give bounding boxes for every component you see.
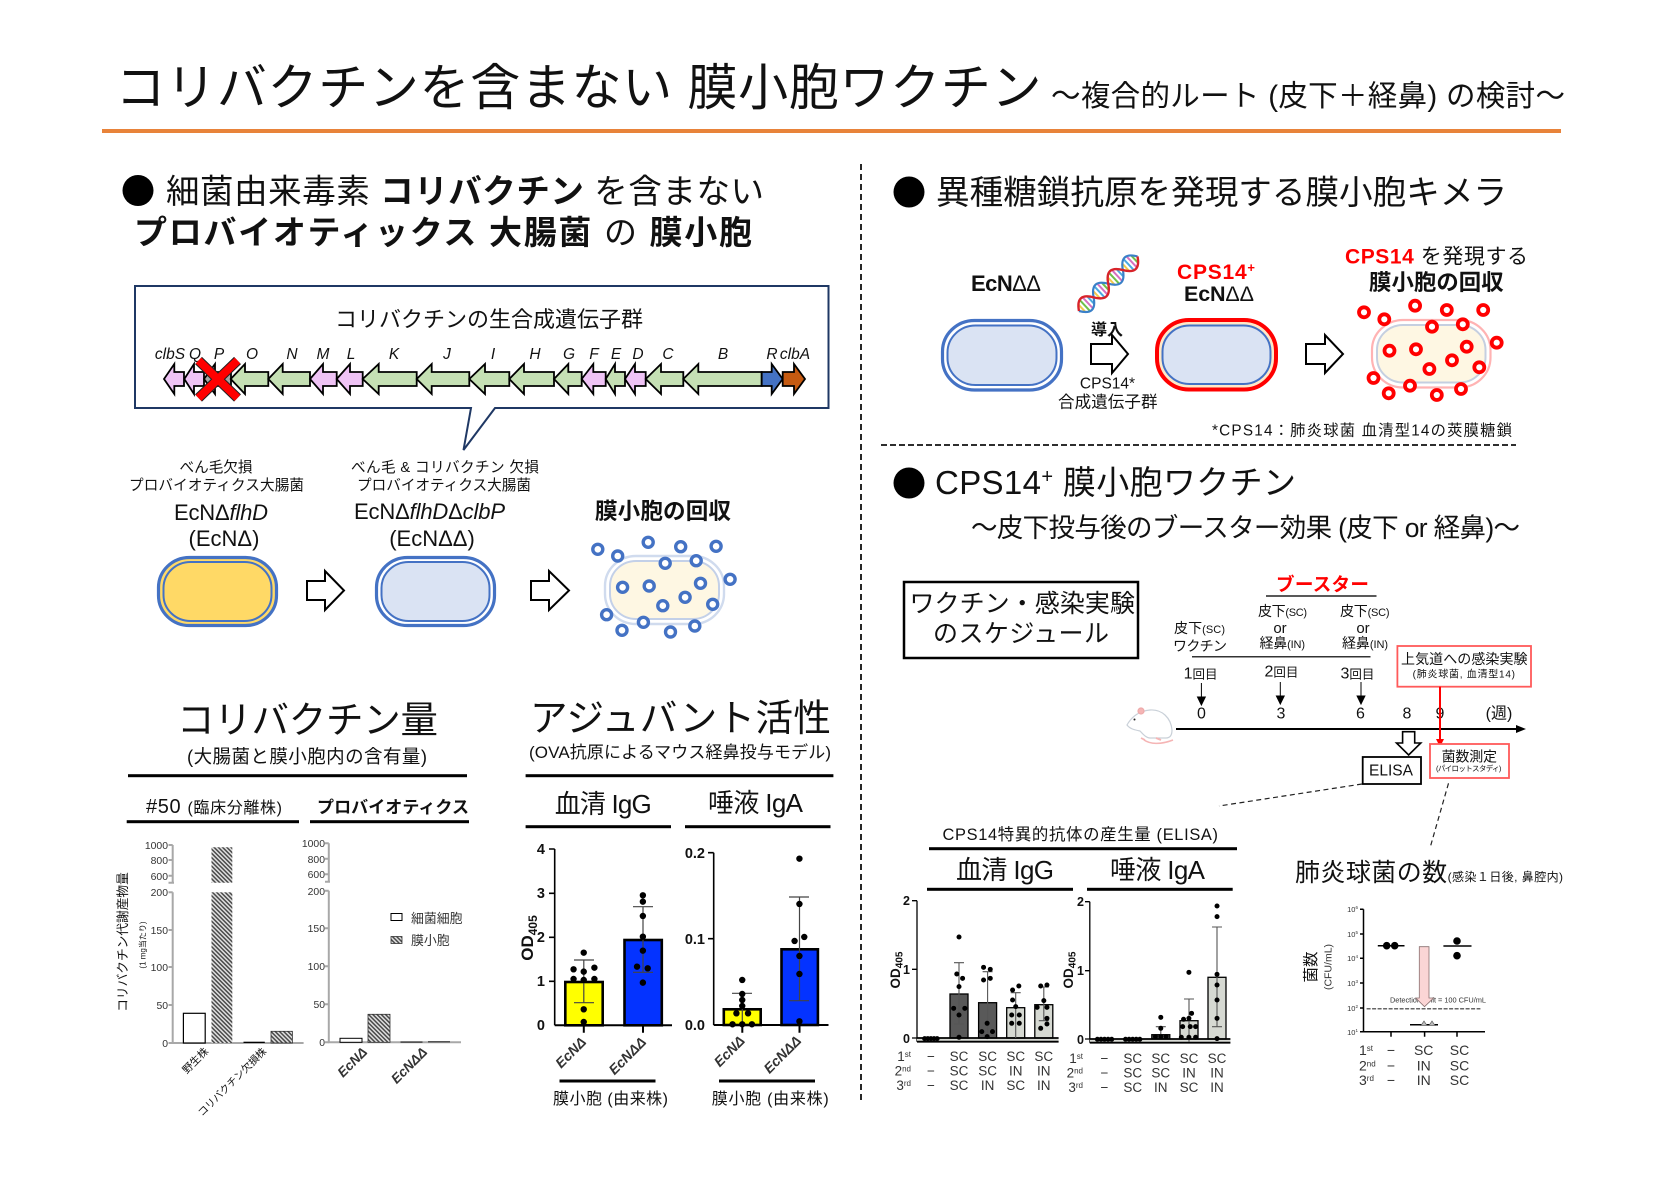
gene labels: F: [589, 346, 600, 363]
divider: horizontal: [881, 444, 1516, 446]
heading bullet: [122, 175, 154, 206]
chart: bacterial count: 2: [1355, 1004, 1358, 1009]
chart: #50 bars: 200: [151, 888, 168, 899]
dosing table: rd: [1076, 1081, 1083, 1090]
heading: CPS14: [935, 464, 1041, 501]
strain label: EcN delta: べん毛欠損: [180, 459, 253, 476]
rule: [526, 825, 671, 828]
chart: ELISA serum IgG: [888, 894, 1059, 1093]
dose 2 route: [1258, 603, 1307, 651]
chart: ELISA saliva IgA: 405: [1068, 951, 1078, 968]
chart: serum IgG: EcNΔΔ: [605, 1034, 649, 1078]
arrow: introduction: 合成遺伝子群: [1058, 392, 1158, 412]
dosing table: IN: [1417, 1058, 1431, 1074]
subheading: 〜皮下投与後のブースター効果 (皮下 or 経鼻)〜: [971, 513, 1520, 543]
icon: DNA helix: [1074, 251, 1143, 317]
week numbers: 9: [1436, 706, 1445, 722]
heading line 2: プロバイオティックス 大腸菌 の 膜小胞: [134, 214, 752, 251]
dose 2 route: 皮下(SC): [1258, 603, 1307, 619]
column heading: serum IgG: 血清 IgG: [555, 789, 652, 819]
chart: probiotic bars: EcNΔΔ: [388, 1045, 430, 1087]
rule: [927, 888, 1073, 891]
week numbers: [1197, 704, 1512, 722]
rule: [128, 774, 467, 777]
chart: serum IgG: 405: [526, 915, 540, 935]
time axis: [1176, 725, 1526, 733]
legend: [391, 911, 463, 948]
dosing table: IN: [1037, 1078, 1051, 1093]
rule: [127, 820, 299, 823]
label: CPS14 vesicle collection: [1345, 246, 1528, 295]
strain label: EcN delta: プロバイオティクス大腸菌: [129, 477, 304, 494]
chart: #50 bars: 100: [151, 963, 168, 974]
dosing table: IN: [1210, 1080, 1224, 1095]
chart: probiotic bars: 600: [308, 870, 325, 881]
dosing table: SC: [1414, 1042, 1433, 1058]
chart: bacterial count: 10: [1347, 905, 1355, 914]
chart: #50 bars: コリバクチン欠損株: [195, 1045, 269, 1119]
legend: 細菌細胞: [411, 911, 463, 926]
gene labels: C: [662, 346, 674, 363]
dose 3 route: [1340, 603, 1390, 651]
strain label: EcN delta delta: EcNΔflhDΔclbP: [354, 499, 505, 524]
arrow: introduction: 導入: [1091, 320, 1123, 339]
callout title: コリバクチンの生合成遺伝子群: [335, 307, 643, 332]
rule: [310, 820, 469, 823]
dosing table: SC: [1123, 1066, 1142, 1080]
chart: serum IgG: [518, 842, 672, 1108]
chart: probiotic bars: 100: [308, 962, 325, 973]
dosing table: SC: [1123, 1080, 1142, 1095]
chart: ELISA serum IgG: 1: [903, 963, 910, 977]
booster label: ブースター: [1276, 574, 1369, 595]
chart: serum IgG: 膜小胞 (由来株): [553, 1090, 668, 1108]
strain label: EcN delta delta: (EcNΔΔ): [389, 526, 475, 551]
dosing table: IN: [1417, 1072, 1431, 1088]
chart: saliva IgA: EcNΔΔ: [760, 1033, 804, 1076]
title rule: [102, 129, 1561, 133]
box: infection experiment: 上気道への感染実験: [1401, 651, 1528, 667]
dosing table: 2: [1359, 1058, 1367, 1074]
subtitle: 〜複合的ルート (皮下＋経鼻) の検討〜: [1051, 80, 1565, 113]
dosing table: −: [1101, 1051, 1109, 1066]
gene labels: D: [632, 346, 644, 363]
gene labels: [155, 346, 810, 363]
dosing table: st: [1367, 1044, 1374, 1053]
strain label: EcN delta delta: [351, 459, 539, 551]
label: CPS14+ EcN delta delta: EcNΔΔ: [1184, 282, 1254, 306]
gene labels: I: [491, 346, 496, 363]
chart: ELISA saliva IgA: 0: [1077, 1033, 1084, 1047]
arrow: [307, 571, 344, 610]
dosing table: [1067, 1051, 1227, 1095]
box: bacterial count: (パイロットスタディ): [1436, 763, 1502, 773]
y axis label: (1 mg当たり): [138, 921, 148, 969]
cell: CPS14 vesicles: [1359, 301, 1502, 400]
panel: CPS14+ vesicle vaccine: [888, 464, 1563, 1095]
callout: gene cluster: [135, 286, 828, 450]
heading: アジュバント活性: [530, 697, 831, 739]
arrow: hollow to ELISA: [1396, 732, 1421, 755]
panel: colibactin amount: [116, 699, 469, 1119]
arrow: [531, 571, 569, 610]
chart: probiotic bars: 800: [308, 855, 325, 866]
dose 3 route: 経鼻(IN): [1342, 635, 1388, 651]
dose counts: [1184, 664, 1374, 682]
cell: yellow EcN delta: [158, 558, 276, 626]
gene labels: K: [389, 346, 400, 363]
connector: count to chart: [1430, 783, 1448, 848]
chart: ELISA saliva IgA: [1061, 895, 1230, 1095]
chart: probiotic bars: 200: [308, 887, 325, 898]
dosing table: −: [927, 1064, 935, 1078]
panel: heterologous glycan chimera: [894, 174, 1528, 440]
chart: serum IgG: 4: [537, 842, 545, 858]
dosing table: 3: [1359, 1072, 1367, 1088]
gene labels: H: [529, 346, 541, 363]
dosing table: SC: [1450, 1042, 1469, 1058]
schedule title box: [904, 582, 1138, 658]
dose 1 route: [1173, 620, 1227, 654]
chart: ELISA serum IgG: 0: [903, 1032, 910, 1046]
dosing table: SC: [1450, 1072, 1469, 1088]
dosing table: −: [1101, 1066, 1109, 1080]
dosing table: IN: [981, 1078, 994, 1093]
chart: bacterial count: 10: [1347, 954, 1355, 963]
column heading: saliva IgA: 唾液 IgA: [1110, 855, 1206, 885]
label: vesicle collection: 膜小胞の回収: [595, 499, 731, 524]
label: CPS14 vesicle collection: CPS14 を発現する: [1345, 246, 1528, 268]
cell: vesicle-releasing blue: [593, 537, 735, 637]
column heading: probiotics: プロバイオティクス: [317, 798, 469, 817]
dosing table: rd: [904, 1079, 911, 1088]
chart: bacterial count: [1302, 905, 1486, 1088]
icon: red deletion cross: [198, 360, 238, 398]
chart: bacterial count: 1: [1355, 1028, 1358, 1033]
label: CPS14+ EcN delta delta: CPS14: [1177, 261, 1247, 284]
schedule title box: のスケジュール: [933, 620, 1109, 648]
arrow: [1306, 335, 1343, 373]
callout box: [135, 286, 828, 450]
cell: blue EcN delta delta: [376, 558, 494, 626]
dosing table: −: [1387, 1042, 1395, 1058]
dose 1 route: ワクチン: [1173, 638, 1227, 654]
box: bacterial count: [1430, 744, 1509, 778]
dosing table: SC: [1208, 1051, 1227, 1066]
arrow: introduction: CPS14*: [1080, 376, 1135, 392]
dosing table: 1: [1359, 1042, 1367, 1058]
dosing table: SC: [1450, 1058, 1469, 1074]
dose counts: 3回目: [1340, 666, 1374, 682]
dosing table: SC: [978, 1064, 997, 1078]
chart: serum IgG: 2: [537, 930, 545, 946]
dose arrows: [1198, 682, 1365, 705]
rule: [685, 825, 830, 828]
chart: serum IgG: 3: [537, 886, 545, 902]
chart: bacterial count: 10: [1347, 979, 1355, 988]
dosing table: IN: [1182, 1066, 1196, 1080]
legend: 膜小胞: [411, 933, 450, 948]
chart: #50 bars: 0: [162, 1039, 168, 1050]
chart: #50 bars: [145, 841, 304, 1119]
heading bullet: [894, 468, 924, 498]
heading line 1: 細菌由来毒素 コリバクチン を含まない: [166, 174, 764, 211]
dosing table: SC: [950, 1078, 969, 1093]
dosing table: IN: [1154, 1080, 1168, 1095]
dosing table: −: [1387, 1072, 1395, 1088]
rule: [526, 774, 833, 777]
chart: bacterial count: 10: [1347, 1028, 1355, 1037]
dosing table: st: [905, 1050, 912, 1059]
dosing table: [1359, 1042, 1469, 1088]
dosing table: SC: [1034, 1049, 1053, 1064]
dose counts: 2回目: [1264, 664, 1298, 680]
gene labels: clbS: [155, 346, 186, 363]
footnote: *CPS14：肺炎球菌 血清型14の莢膜糖鎖: [1212, 422, 1512, 440]
gene labels: E: [611, 346, 622, 363]
dosing table: nd: [1074, 1066, 1083, 1076]
chart: #50 bars: 野生株: [180, 1045, 211, 1076]
chart: bacterial count: 菌数: [1302, 951, 1320, 983]
strain label: EcN delta delta: プロバイオティクス大腸菌: [357, 477, 531, 494]
y axis label: コリバクチン代謝産物量: [116, 872, 130, 1012]
dosing table: SC: [1151, 1051, 1170, 1066]
dosing table: SC: [1006, 1078, 1025, 1093]
chart: #50 bars: 50: [156, 1001, 168, 1012]
chart: bacterial count: 4: [1355, 954, 1358, 959]
chart: #50 bars: 600: [151, 872, 168, 883]
label: CPS14+ EcN delta delta: [1177, 260, 1255, 306]
rule: [1087, 888, 1233, 891]
chart: bacterial count: 3: [1355, 979, 1358, 984]
dosing table: nd: [902, 1064, 911, 1074]
cell: EcN delta delta: [942, 320, 1062, 390]
week numbers: 3: [1277, 706, 1286, 722]
week numbers: 8: [1403, 706, 1412, 722]
dosing table: nd: [1367, 1060, 1376, 1069]
chart: ELISA serum IgG: OD: [888, 968, 903, 988]
strain label: EcN delta: EcNΔflhD: [174, 500, 268, 525]
dose 2 route: or: [1273, 620, 1287, 637]
dosing table: st: [1077, 1052, 1084, 1061]
dose 1 route: 皮下(SC): [1174, 620, 1225, 636]
icon: mouse: [1127, 708, 1173, 743]
column heading: serum IgG: 血清 IgG: [956, 855, 1054, 885]
gene arrows: [164, 364, 805, 394]
dose 3 route: or: [1356, 620, 1370, 637]
dosing table: 1: [897, 1049, 905, 1064]
dose counts: 1回目: [1184, 666, 1218, 682]
heading: 膜小胞ワクチン: [1053, 464, 1296, 501]
schedule title box: ワクチン・感染実験: [910, 590, 1135, 618]
gene labels: Q: [189, 346, 201, 363]
chart: serum IgG: 1: [537, 974, 545, 990]
dosing table: −: [927, 1049, 935, 1064]
dosing table: 1: [1069, 1051, 1077, 1066]
chart: ELISA saliva IgA: 1: [1077, 964, 1084, 978]
strain label: EcN delta: [129, 459, 304, 551]
title: コリバクチンを含まない 膜小胞ワクチン: [116, 60, 1042, 116]
gene labels: clbA: [780, 346, 810, 363]
divider: vertical: [860, 164, 862, 1103]
box: ELISA: [1363, 757, 1421, 784]
detection limit: Detection limit = 100 CFU/mL: [1390, 996, 1486, 1004]
data points: [1378, 937, 1472, 1026]
dosing table: [895, 1049, 1053, 1093]
detection limit: [1367, 996, 1486, 1009]
schedule timeline: [1127, 574, 1531, 784]
chart: #50 bars: 1000: [145, 841, 168, 852]
connector: ELISA to chart: [1219, 784, 1362, 806]
subheading: (大腸菌と膜小胞内の含有量): [187, 746, 427, 767]
dosing table: IN: [1210, 1066, 1224, 1080]
chart: #50 bars: 150: [151, 926, 168, 937]
rule: [929, 847, 1237, 850]
chart: bacterial count: 6: [1355, 905, 1358, 910]
chart: ELISA serum IgG: 2: [903, 894, 910, 908]
dosing table: rd: [1367, 1074, 1374, 1083]
chart: probiotic bars: 50: [313, 1000, 325, 1011]
gene labels: B: [718, 346, 728, 363]
chart: serum IgG: 0: [537, 1018, 545, 1034]
dosing table: SC: [1180, 1080, 1199, 1095]
dosing table: −: [1101, 1080, 1109, 1095]
column heading: #50: #50 (臨床分離株): [146, 796, 282, 818]
strain label: EcN delta: (EcNΔ): [189, 526, 259, 551]
panel: colibactin-free probiotic vesicles: [122, 174, 828, 637]
gene labels: M: [317, 346, 330, 363]
gene labels: N: [286, 346, 298, 363]
label: CPS14 vesicle collection: 膜小胞の回収: [1369, 270, 1504, 295]
chart: ELISA saliva IgA: OD: [1061, 968, 1076, 988]
heading: +: [1041, 466, 1053, 488]
box: bacterial count: 菌数測定: [1442, 748, 1497, 764]
dosing table: −: [1387, 1058, 1395, 1074]
chart: #50 bars: 800: [151, 856, 168, 867]
subheading: (OVA抗原によるマウス経鼻投与モデル): [529, 742, 831, 762]
dosing table: 3: [896, 1078, 904, 1093]
week numbers: 0: [1197, 706, 1206, 722]
dosing table: 2: [1067, 1066, 1074, 1080]
chart: probiotic bars: 1000: [302, 839, 325, 850]
gene labels: O: [246, 346, 258, 363]
dosing table: 3: [1068, 1080, 1076, 1095]
label: CPS14+ EcN delta delta: +: [1247, 260, 1255, 275]
box: infection experiment: [1397, 646, 1531, 687]
chart: probiotic bars: [302, 839, 463, 1087]
chart: bacterial count: (CFU/mL): [1322, 944, 1334, 990]
box: infection experiment: (肺炎球菌, 血清型14): [1413, 668, 1515, 680]
box: ELISA: ELISA: [1369, 762, 1414, 780]
chart: serum IgG: OD: [518, 935, 537, 961]
gene labels: L: [347, 346, 355, 363]
arrow: introduction: [1058, 320, 1158, 412]
chart: serum IgG: EcNΔ: [552, 1034, 589, 1071]
dosing table: SC: [950, 1064, 969, 1078]
heading: pneumococcus count: 肺炎球菌の数(感染１日後, 鼻腔内): [1295, 859, 1563, 887]
chart: saliva IgA: 0.2: [685, 846, 705, 862]
chart: bacterial count: 5: [1355, 930, 1358, 935]
gene labels: J: [442, 346, 451, 363]
dosing table: IN: [1009, 1064, 1022, 1078]
chart: ELISA saliva IgA: 2: [1077, 895, 1084, 909]
chart: probiotic bars: 150: [308, 924, 325, 935]
week numbers: (週): [1486, 704, 1512, 722]
dosing table: SC: [1180, 1051, 1199, 1066]
dose 3 route: 皮下(SC): [1340, 603, 1390, 619]
gene labels: P: [214, 346, 225, 363]
chart: saliva IgA: 0.0: [685, 1018, 705, 1034]
dosing table: −: [927, 1078, 935, 1093]
label: EcN delta delta: EcNΔΔ: [971, 271, 1041, 296]
y axis label: [116, 872, 148, 1012]
panel: adjuvant activity: [518, 697, 833, 1108]
chart: bacterial count: 10: [1347, 930, 1355, 939]
dosing table: SC: [978, 1049, 997, 1064]
column heading: saliva IgA: 唾液 IgA: [708, 788, 804, 818]
chart: probiotic bars: 0: [319, 1038, 325, 1049]
arrow: bacterial reduction: [1416, 947, 1434, 1007]
dosing table: 2: [895, 1064, 902, 1078]
gene labels: R: [766, 346, 778, 363]
gene labels: G: [563, 346, 575, 363]
dosing table: SC: [1123, 1051, 1142, 1066]
strain label: EcN delta delta: べん毛 & コリバクチン 欠損: [351, 459, 539, 476]
chart: saliva IgA: 0.1: [685, 932, 705, 948]
chart: saliva IgA: EcNΔ: [711, 1033, 748, 1070]
chart: saliva IgA: [685, 846, 829, 1108]
heading: 異種糖鎖抗原を発現する膜小胞キメラ: [936, 174, 1507, 212]
dosing table: SC: [1006, 1049, 1025, 1064]
dose 2 route: 経鼻(IN): [1260, 635, 1305, 651]
heading: コリバクチン量: [177, 699, 438, 741]
chart: probiotic bars: EcNΔ: [335, 1045, 370, 1080]
heading bullet: [894, 176, 924, 208]
arrow: red to bacterial count: [1436, 687, 1444, 747]
chart: ELISA serum IgG: 405: [894, 951, 906, 968]
week numbers: 6: [1356, 706, 1365, 722]
dosing table: IN: [1037, 1064, 1051, 1078]
dosing table: SC: [1151, 1066, 1170, 1080]
chart: bacterial count: 10: [1347, 1004, 1355, 1013]
cell: CPS14 expressing: [1157, 320, 1276, 390]
heading: ELISA results: CPS14特異的抗体の産生量 (ELISA): [942, 826, 1218, 844]
chart: saliva IgA: 膜小胞 (由来株): [712, 1090, 829, 1108]
dosing table: SC: [950, 1049, 969, 1064]
